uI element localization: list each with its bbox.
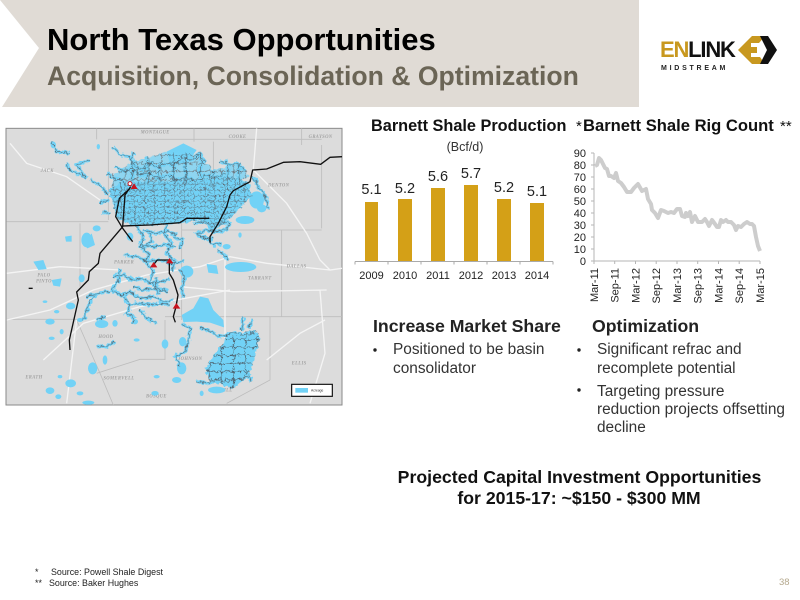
county labels: DALLAS: [286, 265, 307, 270]
bar chart: production: 5.1: [361, 182, 382, 198]
line chart: rig count: 0: [580, 256, 586, 268]
page number: 38: [779, 577, 790, 588]
line chart: rig count: 10: [574, 244, 586, 256]
county labels: BOSQUE: [145, 394, 167, 399]
line chart: rig count: [574, 148, 767, 303]
panel: increase market share: Positioned to be basin: [393, 341, 544, 358]
county labels: PALO: [37, 274, 51, 279]
footnotes: [35, 567, 164, 588]
line chart: rig count: Mar-13: [672, 268, 684, 303]
acreage blobs: [33, 142, 266, 405]
bar chart: production: 2011: [426, 270, 450, 282]
line chart: rig count: Sep-12: [651, 268, 663, 303]
small black marker: [29, 288, 33, 289]
plant markers: [128, 182, 180, 309]
county labels: PARKER: [114, 260, 134, 265]
rig count source asterisks: **: [780, 118, 792, 135]
line chart: rig count: 30: [574, 220, 586, 232]
county labels: [24, 130, 333, 399]
chart unit: (Bcf/d): [447, 140, 483, 154]
title: North Texas Opportunities: [47, 22, 436, 57]
callout: capital investment: Projected Capital Investment Opportunities: [398, 467, 761, 487]
bar chart: production: 2012: [459, 270, 483, 282]
county labels: GRAYSON: [309, 135, 333, 140]
logo: EnLink Midstream: ENLINK: [660, 37, 736, 62]
production chart heading: Barnett Shale Production: [371, 117, 566, 135]
subtitle: Acquisition, Consolidation & Optimization: [47, 61, 579, 91]
county labels: PINTO: [36, 279, 52, 284]
bar chart: production: [355, 166, 553, 282]
header banner: [0, 0, 639, 107]
logo: EnLink Midstream: MIDSTREAM: [661, 65, 728, 72]
county labels: JOHNSON: [177, 357, 203, 362]
panel: increase market share: Increase Market Share: [373, 316, 561, 336]
line chart: rig count: 50: [574, 196, 586, 208]
county labels: SOMERVELL: [103, 377, 134, 382]
panel: optimization: Targeting pressure: [597, 383, 724, 400]
line chart: rig count: Sep-13: [693, 268, 705, 303]
panel: optimization: decline: [597, 419, 646, 436]
county labels: ELLIS: [291, 361, 307, 366]
county labels: DENTON: [267, 184, 290, 189]
map legend: [292, 384, 332, 396]
callout: capital investment: [398, 467, 761, 508]
county labels: COOKE: [229, 135, 246, 140]
line chart: rig count: 40: [574, 208, 586, 220]
line chart: rig count: Mar-11: [589, 268, 601, 302]
gathering network: [52, 142, 268, 388]
county labels: HOOD: [97, 335, 114, 340]
line chart: rig count: 60: [574, 184, 586, 196]
bar chart: production: 2013: [492, 270, 516, 282]
bar chart: production: 5.1: [527, 184, 547, 200]
line chart: rig count: Sep-14: [734, 268, 746, 303]
county labels: TARRANT: [248, 277, 272, 282]
line chart: rig count: Mar-14: [714, 268, 726, 303]
map legend: Acreage: [311, 389, 324, 393]
production source asterisk: *: [576, 118, 582, 135]
line chart: rig count: 90: [574, 148, 586, 160]
line chart: rig count: 80: [574, 160, 586, 172]
map of North Texas acreage and pipelines: [6, 128, 342, 405]
bar chart: production: 2014: [525, 270, 549, 282]
panel: optimization: reduction projects offsetting: [597, 401, 785, 418]
county labels: HILL: [219, 389, 232, 394]
bar chart: production: 5.2: [494, 180, 514, 196]
logo: EnLink Midstream: [660, 36, 777, 72]
line chart: rig count: Mar-12: [630, 268, 642, 303]
county labels: MONTAGUE: [140, 130, 170, 135]
bar chart: production: 5.2: [395, 181, 415, 197]
callout: capital investment: for 2015-17: ~$150 - $300 MM: [457, 488, 701, 508]
county labels: JACK: [40, 169, 54, 174]
bar chart: production: 5.6: [428, 169, 448, 185]
rig count chart heading: Barnett Shale Rig Count: [583, 116, 774, 135]
footnotes: Source: Baker Hughes: [49, 578, 139, 588]
bar chart: production: 5.7: [461, 166, 481, 182]
panel: optimization: recomplete potential: [597, 360, 736, 377]
panel: optimization: [577, 316, 785, 436]
footnotes: Source: Powell Shale Digest: [51, 567, 164, 577]
bar chart: production: 2009: [359, 270, 384, 282]
line chart: rig count: Mar-15: [755, 268, 767, 303]
panel: increase market share: consolidator: [393, 360, 476, 377]
county labels: ERATH: [24, 376, 43, 381]
line chart: rig count: Sep-11: [610, 268, 622, 303]
panel: optimization: Optimization: [592, 316, 699, 336]
line chart: rig count: 20: [574, 232, 586, 244]
line chart: rig count: 70: [574, 172, 586, 184]
footnotes: *: [35, 567, 39, 577]
main pipelines: [69, 157, 342, 350]
panel: increase market share: [373, 316, 561, 377]
panel: optimization: Significant refrac and: [597, 341, 742, 358]
footnotes: **: [35, 578, 42, 588]
bar chart: production: 2010: [393, 270, 417, 282]
